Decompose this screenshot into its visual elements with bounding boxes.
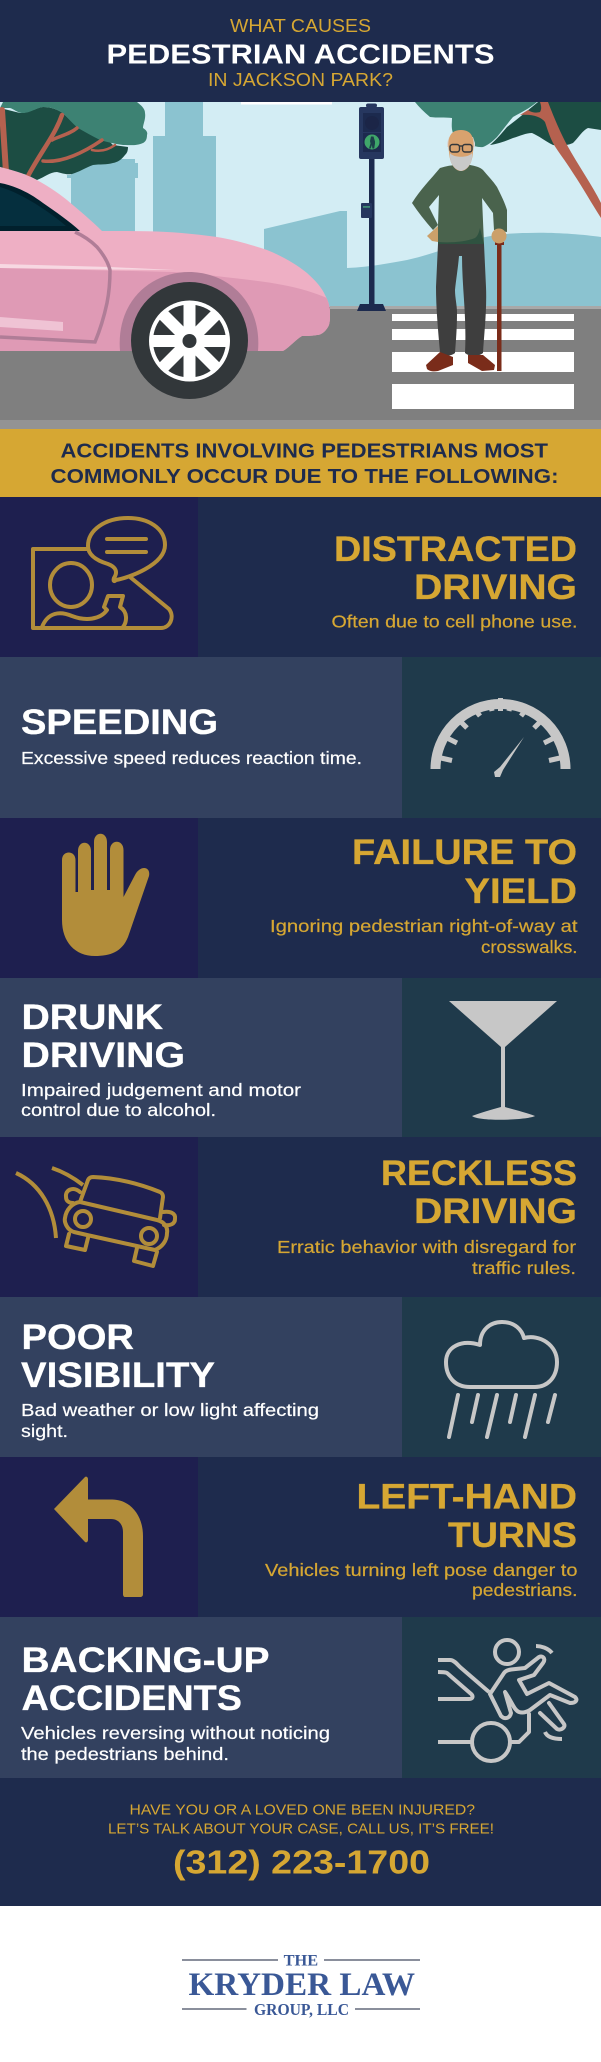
description line 2: control due to alcohol. <box>21 1100 216 1120</box>
description: Vehicles reversing without noticing <box>21 1723 330 1743</box>
panel: speeding <box>0 657 601 818</box>
panel: failure to yield <box>0 818 601 978</box>
logo word: group llc: GROUP, LLC <box>254 2000 349 2019</box>
subtitle line 1: ACCIDENTS INVOLVING PEDESTRIANS MOST <box>60 440 548 462</box>
heading line 2: DRIVING <box>414 568 577 607</box>
shoes <box>426 352 495 371</box>
panel: poor visibility <box>0 1297 601 1458</box>
description: Bad weather or low light affecting <box>21 1400 319 1420</box>
description: Excessive speed reduces reaction time. <box>21 748 362 768</box>
icon: left turn arrow <box>54 1477 143 1597</box>
icon: swerving car <box>16 1168 175 1266</box>
panel: drunk driving <box>0 978 601 1138</box>
invitation line: LET’S TALK ABOUT YOUR CASE, CALL US, IT’S FREE! <box>108 1820 494 1838</box>
crosswalk stripes <box>392 314 574 409</box>
icon: raised hand <box>62 834 149 956</box>
logo word: the: THE <box>284 1952 318 1970</box>
left tree <box>0 102 147 180</box>
wheel arch <box>120 272 258 351</box>
heading: SPEEDING <box>21 703 218 742</box>
description: Often due to cell phone use. <box>332 612 578 632</box>
description line 2: traffic rules. <box>472 1258 576 1278</box>
phone number: (312) 223-1700 <box>173 1844 430 1880</box>
pink car <box>0 167 340 399</box>
logo word: kryder law: KRYDER LAW <box>188 1967 415 2003</box>
subtitle line 2: COMMONLY OCCUR DUE TO THE FOLLOWING: <box>50 466 558 488</box>
title line: in jackson park: IN JACKSON PARK? <box>208 69 393 90</box>
description line 2: the pedestrians behind. <box>21 1744 229 1764</box>
heading line 2: DRIVING <box>414 1192 577 1231</box>
heading: BACKING-UP <box>22 1641 270 1680</box>
sweater <box>412 165 507 244</box>
wheel <box>131 282 248 399</box>
trousers <box>436 244 486 356</box>
car window <box>0 183 80 231</box>
panel: backing-up accidents <box>0 1617 601 1778</box>
right tree <box>415 102 601 218</box>
hands <box>427 226 438 242</box>
street scene illustration <box>0 102 601 429</box>
description: Ignoring pedestrian right-of-way at <box>270 916 578 936</box>
logo: the kryder law group <box>182 1952 420 2019</box>
heading: DRUNK <box>22 998 163 1037</box>
road <box>0 306 601 429</box>
title line: what causes: WHAT CAUSES <box>230 15 371 36</box>
panel: distracted driving <box>0 497 601 658</box>
cane <box>495 242 504 371</box>
heading: DISTRACTED <box>334 530 577 569</box>
icon: martini glass <box>449 1001 557 1120</box>
head and beard <box>447 137 475 147</box>
heading line 2: YIELD <box>464 872 577 911</box>
heading line 2: VISIBILITY <box>21 1356 215 1395</box>
skyline buildings <box>67 102 601 307</box>
description: Erratic behavior with disregard for <box>277 1237 576 1257</box>
panel: left-hand turns <box>0 1457 601 1618</box>
description line 2: pedestrians. <box>472 1580 578 1600</box>
glasses <box>450 144 472 152</box>
heading: RECKLESS <box>381 1154 577 1193</box>
icon: rain cloud <box>446 1322 557 1437</box>
heading: LEFT-HAND <box>356 1478 577 1516</box>
white logo area background <box>0 1906 601 2062</box>
heading line 2: TURNS <box>448 1516 577 1555</box>
icon: texting driver <box>33 518 172 628</box>
icon: speedometer <box>436 698 566 777</box>
header banner <box>0 0 601 102</box>
title line: pedestrian accidents: PEDESTRIAN ACCIDENTS <box>106 38 495 70</box>
description: Impaired judgement and motor <box>21 1080 301 1100</box>
panel: reckless driving <box>0 1137 601 1298</box>
description line 2: sight. <box>21 1421 68 1441</box>
heading line 2: DRIVING <box>22 1036 185 1075</box>
heading: POOR <box>22 1318 134 1357</box>
heading line 2: ACCIDENTS <box>22 1679 242 1718</box>
traffic light <box>357 104 386 311</box>
description line 2: crosswalks. <box>481 937 578 957</box>
icon: person hit by reversing car <box>438 1640 576 1761</box>
question line: HAVE YOU OR A LOVED ONE BEEN INJURED? <box>130 1802 475 1818</box>
elderly pedestrian with cane <box>412 130 507 371</box>
call to action footer <box>0 1778 601 1906</box>
description: Vehicles turning left pose danger to <box>265 1560 578 1580</box>
heading: FAILURE TO <box>352 833 577 872</box>
gold subtitle band <box>0 429 601 498</box>
